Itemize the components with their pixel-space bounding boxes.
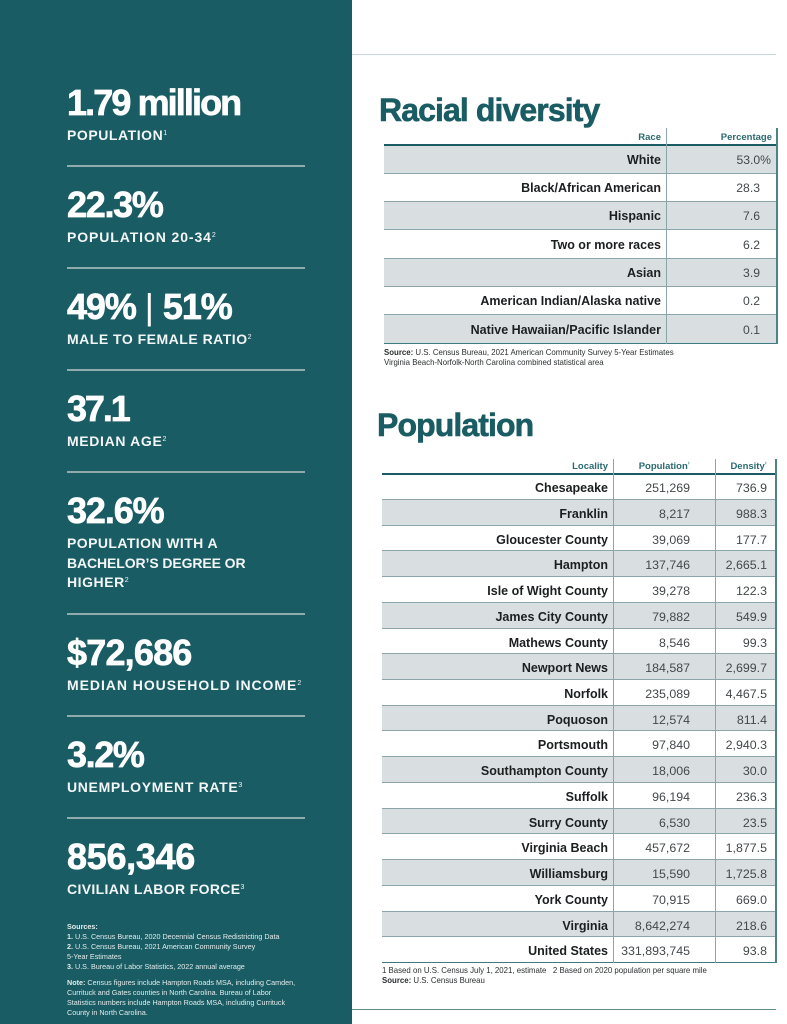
table: population: 30.0 — [743, 764, 767, 778]
table: racial diversity: Black/African American — [521, 181, 661, 195]
table: population: 15,590 — [652, 867, 690, 881]
table header — [572, 460, 767, 472]
table: racial diversity: Asian — [627, 266, 661, 280]
stat: unemployment rate — [67, 734, 242, 795]
table: population: Isle of Wight County — [487, 584, 608, 598]
table: population: 2,665.1 — [726, 558, 767, 572]
stat: bachelor's degree: POPULATION WITH A — [67, 535, 218, 551]
panel: key statistics sidebar — [0, 0, 352, 1024]
stat: median household income — [67, 632, 301, 693]
table header: Race — [638, 132, 661, 143]
stat: population 20-34: 22.3% — [67, 184, 163, 225]
table: population: James City County — [495, 610, 608, 624]
table: population: Chesapeake — [535, 481, 608, 495]
table: racial diversity: 3.9 — [743, 266, 760, 280]
table: population: United States — [528, 944, 608, 958]
footnote: population notes and source: Source: U.S. Census Bureau — [382, 976, 485, 985]
footnote: population notes and source — [382, 966, 707, 985]
stat: median age: 37.1 — [67, 388, 129, 429]
table: racial diversity — [384, 128, 778, 344]
text block: note: County in North Carolina. — [67, 1008, 148, 1017]
table: racial diversity: 7.6 — [743, 209, 760, 223]
table: population: 39,069 — [652, 533, 690, 547]
table: population: 93.8 — [743, 944, 767, 958]
stat: civilian labor force: CIVILIAN LABOR FORCE3 — [67, 881, 244, 897]
table: population: 2,699.7 — [726, 661, 767, 675]
table: population: 736.9 — [736, 481, 767, 495]
table: racial diversity: 0.1 — [743, 323, 760, 337]
table: population: 1,877.5 — [726, 841, 767, 855]
table: population: 18,006 — [652, 764, 690, 778]
table: population: 184,587 — [645, 661, 690, 675]
text block: sources — [67, 922, 280, 971]
table: population: Norfolk — [564, 687, 608, 701]
table: population: 218.6 — [736, 919, 767, 933]
table: racial diversity: 28.3 — [736, 181, 760, 195]
table: racial diversity: Native Hawaiian/Pacific Islander — [471, 323, 661, 337]
stat: bachelor's degree: HIGHER2 — [67, 574, 129, 590]
table: population: 549.9 — [736, 610, 767, 624]
table: population: Surry County — [529, 816, 608, 830]
footnote: racial diversity source — [384, 348, 674, 367]
stat: male to female ratio: MALE TO FEMALE RATIO2 — [67, 331, 252, 347]
table: population: 122.3 — [736, 584, 767, 598]
stat: unemployment rate: 3.2% — [67, 734, 143, 775]
table: population: 97,840 — [652, 738, 690, 752]
table: population: 4,467.5 — [726, 687, 767, 701]
table: population: 99.3 — [743, 636, 767, 650]
stat: population 20-34: POPULATION 20-342 — [67, 229, 216, 245]
table: population: Franklin — [559, 507, 608, 521]
table: population: 988.3 — [736, 507, 767, 521]
text block: note: Statistics numbers include Hampton Roads MSA, including Currituck — [67, 998, 285, 1007]
stat: male to female ratio — [67, 286, 252, 347]
text block: note: Currituck and Gates counties in North Carolina. Bureau of Labor — [67, 988, 271, 997]
stat: median household income: MEDIAN HOUSEHOLD INCOME2 — [67, 677, 301, 693]
table: population: 39,278 — [652, 584, 690, 598]
stat: population — [67, 82, 240, 143]
stat: civilian labor force — [67, 836, 244, 897]
table: population: Suffolk — [566, 790, 608, 804]
stat: median household income: $72,686 — [67, 632, 192, 673]
table: population: 235,089 — [645, 687, 690, 701]
stat: population: POPULATION1 — [67, 127, 167, 143]
table: population: 811.4 — [737, 713, 767, 727]
table: population: Virginia — [562, 919, 608, 933]
text block: sources: Sources: — [67, 922, 98, 931]
table: racial diversity: White — [627, 153, 661, 167]
table: population: Newport News — [522, 661, 608, 675]
table: population: 669.0 — [736, 893, 767, 907]
table: population: Williamsburg — [530, 867, 608, 881]
stat: median age — [67, 388, 166, 449]
heading: racial diversity: Racial diversity — [379, 92, 599, 128]
heading: population: Population — [377, 407, 533, 443]
table: population: 236.3 — [736, 790, 767, 804]
table: racial diversity: 0.2 — [743, 294, 760, 308]
text block: sources: 2. U.S. Census Bureau, 2021 American Community Survey — [67, 942, 255, 951]
table: population: 8,642,274 — [635, 919, 690, 933]
table: population: 8,217 — [659, 507, 690, 521]
table: population: Poquoson — [547, 713, 608, 727]
stat: male to female ratio: 49% | 51% — [67, 286, 232, 327]
stat: median age: MEDIAN AGE2 — [67, 433, 166, 449]
table: population — [382, 459, 777, 963]
stat: bachelor's degree — [67, 490, 246, 590]
text block: note: Note: Census figures include Hampton Roads MSA, including Camden, — [67, 978, 295, 987]
table: racial diversity: 53.0% — [736, 153, 771, 167]
table: racial diversity: 6.2 — [743, 238, 760, 252]
table: population: 251,269 — [645, 481, 690, 495]
table: population: Southampton County — [481, 764, 608, 778]
footnote: population notes and source: 1 Based on U.S. Census July 1, 2021, estimate 2 Based on 2020 population per square mile — [382, 966, 707, 975]
table header: Locality — [572, 461, 608, 472]
text block: sources: 1. U.S. Census Bureau, 2020 Decennial Census Redistricting Data — [67, 932, 280, 941]
table: population: 457,672 — [645, 841, 690, 855]
table: population: Gloucester County — [496, 533, 608, 547]
table: population: 1,725.8 — [726, 867, 767, 881]
table: population: 331,893,745 — [621, 944, 690, 958]
stat: population 20-34 — [67, 184, 216, 245]
table header — [638, 132, 772, 143]
table: population: 2,940.3 — [726, 738, 767, 752]
table: population: 96,194 — [652, 790, 690, 804]
table: population: 79,882 — [652, 610, 690, 624]
table: population: Hampton — [554, 558, 608, 572]
footnote: racial diversity source: Source: U.S. Census Bureau, 2021 American Community Survey 5-Year Estimates — [384, 348, 674, 357]
table: population: Portsmouth — [538, 738, 608, 752]
footnote: racial diversity source: Virginia Beach-Norfolk-North Carolina combined statistical area — [384, 358, 604, 367]
table: population: 6,530 — [659, 816, 690, 830]
table: population: 23.5 — [743, 816, 767, 830]
table: population: York County — [535, 893, 608, 907]
table header: Population‡ — [639, 460, 690, 472]
table: population: Mathews County — [509, 636, 608, 650]
table header: Percentage — [721, 132, 772, 143]
table header: Density‡ — [730, 460, 767, 472]
stat: unemployment rate: UNEMPLOYMENT RATE3 — [67, 779, 242, 795]
table: population: 177.7 — [736, 533, 767, 547]
stat: population: 1.79 million — [67, 82, 240, 123]
table: population: 12,574 — [652, 713, 690, 727]
text block: sources: 5-Year Estimates — [67, 952, 121, 961]
stat: civilian labor force: 856,346 — [67, 836, 195, 877]
text block: sources: 3. U.S. Bureau of Labor Statistics, 2022 annual average — [67, 962, 245, 971]
text block: note — [67, 978, 295, 1017]
table: population: 70,915 — [652, 893, 690, 907]
table: population: Virginia Beach — [521, 841, 608, 855]
table: racial diversity: Two or more races — [551, 238, 661, 252]
table: racial diversity: American Indian/Alaska native — [480, 294, 661, 308]
table: racial diversity: Hispanic — [609, 209, 661, 223]
table: population: 8,546 — [659, 636, 690, 650]
stat: bachelor's degree: BACHELOR’S DEGREE OR — [67, 555, 245, 571]
stat: bachelor's degree: 32.6% — [67, 490, 164, 531]
table: population: 137,746 — [645, 558, 690, 572]
